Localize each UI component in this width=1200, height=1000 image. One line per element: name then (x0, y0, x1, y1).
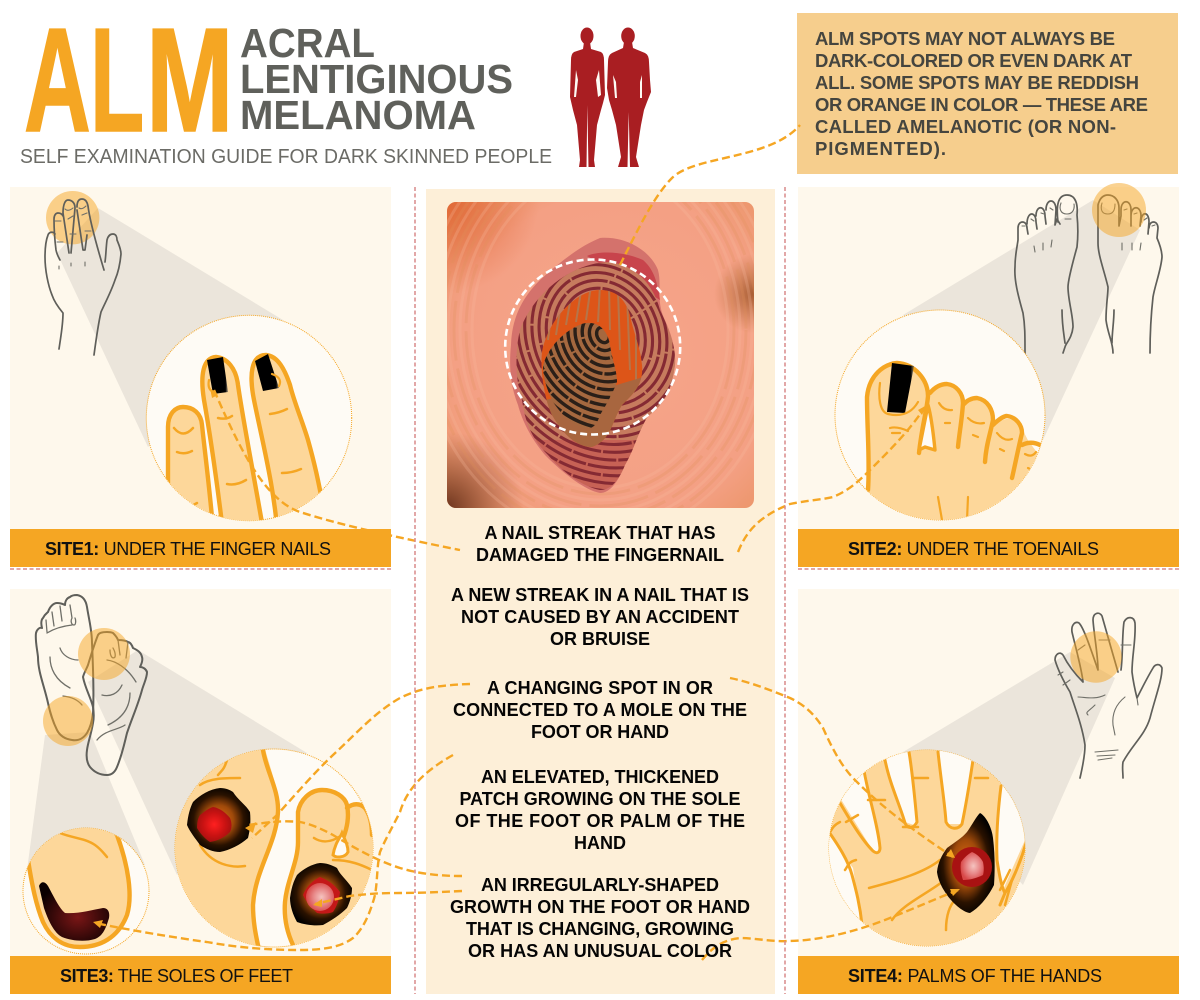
callout: amelanotic note: DARK-COLORED OR EVEN DARK AT (815, 50, 1133, 71)
banner: site 4: SITE4: PALMS OF THE HANDS (848, 966, 1102, 986)
text: symptom 3: FOOT OR HAND (531, 722, 669, 742)
icon: feet (1015, 183, 1162, 353)
lesion black core (543, 322, 617, 428)
text: symptom 5: THAT IS CHANGING, GROWING (466, 919, 734, 939)
title: ALM: A (24, 0, 91, 163)
panel: center symptoms (426, 189, 775, 994)
text: symptom 1 (476, 523, 724, 565)
panel: site 4 (798, 589, 1179, 956)
title: ALM: L (90, 0, 144, 163)
lesion: palm (937, 813, 995, 913)
text: symptom 3 (453, 678, 747, 742)
connector arrows (93, 125, 960, 960)
text: symptom 2: NOT CAUSED BY AN ACCIDENT (461, 607, 739, 627)
icon: human silhouettes (570, 28, 651, 167)
callout: amelanotic note: CALLED AMELANOTIC (OR NON- (815, 116, 1116, 137)
lesion ridges (516, 262, 676, 490)
icon: palm hand (1055, 613, 1162, 778)
text: symptom 2: OR BRUISE (550, 629, 650, 649)
magnified sole: heel (22, 828, 150, 954)
title: ALM (24, 0, 234, 163)
callout: amelanotic note: ALL. SOME SPOTS MAY BE REDDISH (815, 72, 1139, 93)
lesion outer halo (510, 238, 675, 493)
callout: amelanotic note: OR ORANGE IN COLOR — THESE ARE (815, 94, 1148, 115)
icon: hand (45, 191, 121, 355)
title: full name: MELANOMA (240, 92, 476, 138)
magnified palm (827, 740, 1030, 946)
text: symptom 4 (455, 767, 745, 853)
lesion red cap (587, 253, 660, 300)
banner: site 2 (798, 529, 1179, 567)
banner: site 2: SITE2: UNDER THE TOENAILS (848, 539, 1099, 559)
magnified soles: lesions (174, 748, 374, 948)
callout: amelanotic note: ALM SPOTS MAY NOT ALWAYS BE (815, 28, 1115, 49)
banner: site 1: SITE1: UNDER THE FINGER NAILS (45, 539, 331, 559)
magnified fingers (146, 315, 352, 540)
banner: site 3: SITE3: THE SOLES OF FEET (60, 966, 293, 986)
image: fingerprint lesion (447, 202, 754, 508)
panel: site 3 (10, 589, 400, 960)
banner: site 1 (10, 529, 391, 567)
text: symptom 2 (451, 585, 749, 649)
subtitle: SELF EXAMINATION GUIDE FOR DARK SKINNED PEOPLE (20, 146, 552, 168)
zoom cones (88, 650, 307, 875)
text: symptom 1: DAMAGED THE FINGERNAIL (476, 545, 724, 565)
zoom cone (903, 200, 1140, 440)
text: symptom 2: A NEW STREAK IN A NAIL THAT IS (451, 585, 749, 605)
lesion right (290, 863, 352, 925)
zoom cone (57, 208, 283, 447)
title: full name (240, 20, 513, 138)
banner: site 4 (798, 956, 1179, 994)
text: symptom 5: AN IRREGULARLY-SHAPED (481, 875, 719, 895)
title: ALM: M (146, 0, 234, 163)
banner: site 3 (10, 956, 391, 994)
magnified toes (835, 310, 1050, 530)
text: symptom 1: A NAIL STREAK THAT HAS (484, 523, 716, 543)
lesion orange core (542, 290, 642, 447)
text: symptom 4: OF THE FOOT OR PALM OF THE (455, 811, 745, 831)
text: symptom 5: GROWTH ON THE FOOT OR HAND (450, 897, 750, 917)
lesion left (187, 788, 250, 852)
text: symptom 3: CONNECTED TO A MOLE ON THE (453, 700, 747, 720)
title: full name: ACRAL (240, 20, 375, 66)
callout: amelanotic note: PIGMENTED). (815, 138, 946, 159)
text: symptom 4: HAND (574, 833, 626, 853)
callout: amelanotic note (797, 13, 1178, 174)
icon: soles of feet (36, 595, 147, 775)
title: full name: LENTIGINOUS (240, 56, 513, 102)
header title block (20, 0, 552, 168)
lesion dashed outline (505, 260, 680, 434)
zoom cone (903, 652, 1115, 885)
panel: site 1 (10, 187, 391, 540)
text: symptom 4: AN ELEVATED, THICKENED (481, 767, 719, 787)
text: symptom 4: PATCH GROWING ON THE SOLE (460, 789, 740, 809)
panel: site 2 (798, 183, 1179, 530)
text: symptom 3: A CHANGING SPOT IN OR (487, 678, 713, 698)
text: symptom 5 (450, 875, 750, 961)
text: symptom 5: OR HAS AN UNUSUAL COLOR (468, 941, 732, 961)
